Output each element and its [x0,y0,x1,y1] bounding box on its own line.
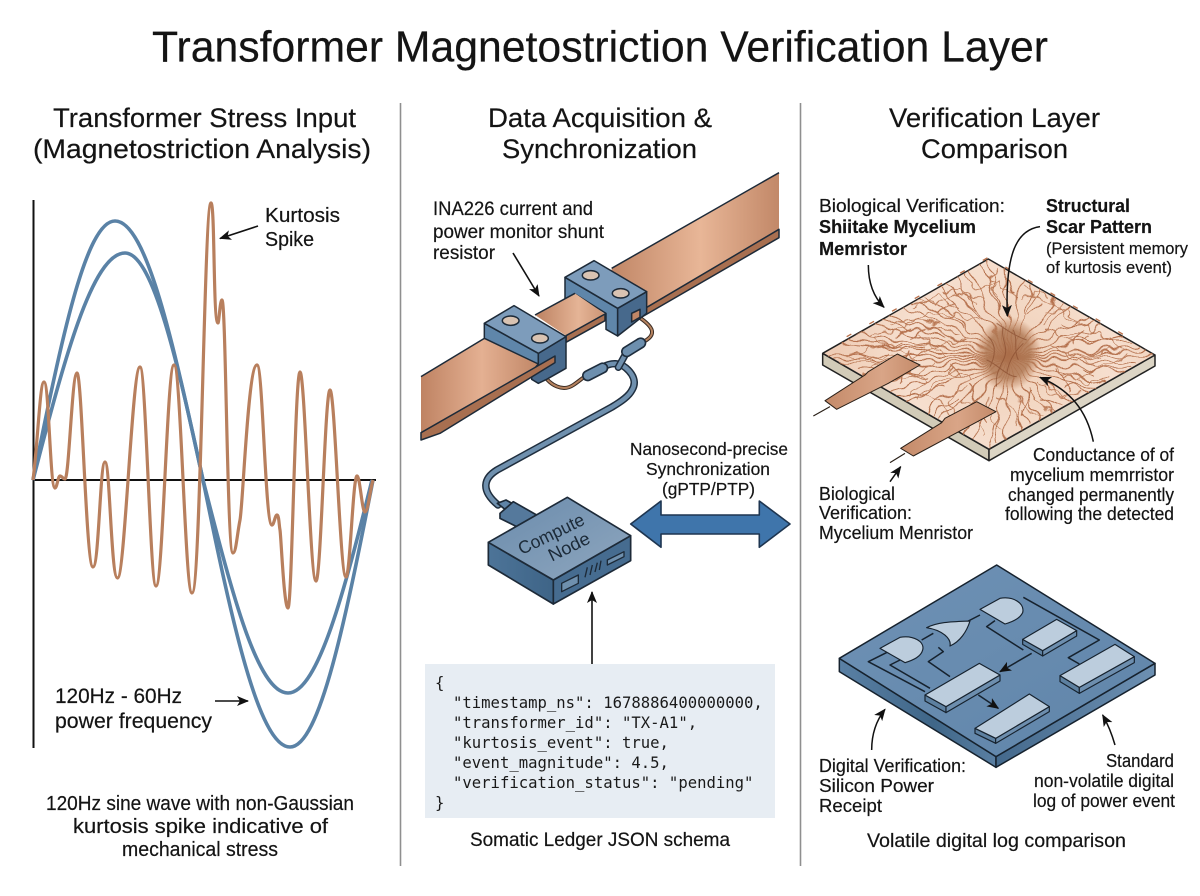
center shunt [535,293,605,342]
JSON schema panel: "event_magnitude": 4.5, [453,754,669,772]
label: nanosecond synchronization: (gPTP/PTP) [662,479,755,499]
label: silicon power receipt: Receipt [819,795,882,816]
label: conductance change: following the detected [1005,504,1174,524]
heading: data acquisition: Synchronization [502,134,697,164]
label: non-volatile log: non-volatile digital [1034,771,1174,791]
caption: waveform: 120Hz sine wave with non-Gaussian [46,793,354,815]
JSON schema panel: "kurtosis_event": true, [453,734,669,752]
title: Transformer Magnetostriction Verification Layer [152,22,1048,72]
label: shiitake mycelium memristor: Memristor [819,238,907,259]
heading: data acquisition: Data Acquisition & [488,103,712,133]
label: non-volatile log: log of power event [1033,791,1175,811]
arrows on chip [872,709,1115,750]
label: structural scar pattern: of kurtosis event) [1046,258,1172,277]
label: silicon power receipt: Silicon Power [819,775,934,796]
panel: verification layer comparison [813,103,1188,852]
cable: sensor to compute node [486,364,634,505]
label: shiitake mycelium memristor: Shiitake Mycelium [819,216,976,237]
caption: volatile digital log comparison: Volatile digital log comparison [867,830,1126,852]
label: conductance change: changed permanently [1008,485,1174,505]
arrows on board [868,227,1093,482]
label: conductance change: Conductance of of [1033,445,1175,465]
compute node: Node [545,528,593,565]
heading: verification layer: Comparison [921,134,1068,164]
label: conductance change [1005,445,1175,524]
callout: power frequency: 120Hz - 60Hz [55,685,182,708]
caption: waveform [46,793,354,861]
JSON schema panel: "timestamp_ns": 1678886400000000, [453,694,763,712]
label: INA226 shunt resistor [433,199,605,296]
callout: power frequency: power frequency [55,710,212,733]
heading: verification layer [889,103,1100,164]
label: structural scar pattern: (Persistent memory [1046,239,1188,258]
arrow: JSON to compute node [591,592,593,664]
waveform chart [33,200,376,748]
label: INA226 shunt resistor: power monitor shunt [433,222,605,243]
silicon chip diagram [839,565,1155,767]
label: conductance change: mycelium memrristor [1010,465,1174,485]
label: non-volatile log: Standard [1106,751,1174,771]
heading: transformer stress input: Transformer Stress Input [53,103,357,133]
label: silicon power receipt [819,755,966,816]
compute node [488,497,631,604]
label: shiitake mycelium memristor [819,195,1005,259]
label: INA226 shunt resistor: resistor [433,243,496,264]
heading: transformer stress input: (Magnetostriction Analysis) [33,134,371,164]
heading: transformer stress input [33,103,371,164]
right clamp [565,261,647,336]
wires [542,317,652,388]
left bar section [421,338,555,433]
JSON schema panel: { [435,674,444,692]
panel: transformer stress input [33,103,376,861]
caption: JSON schema: Somatic Ledger JSON schema [470,829,730,851]
electrodes [813,354,996,463]
JSON schema panel: "verification_status": "pending" [453,774,753,792]
callout: kurtosis spike: Kurtosis [265,205,340,227]
label: nanosecond synchronization: Nanosecond-precise [630,439,788,459]
heading: verification layer: Verification Layer [889,103,1100,133]
caption: waveform: kurtosis spike indicative of [73,816,328,838]
compute node: Compute [515,509,588,559]
mycelium network [823,259,1155,449]
memory blocks [925,619,1134,743]
mycelium memristor board [813,227,1155,482]
label: structural scar pattern [1046,195,1188,277]
label: shiitake mycelium memristor: Biological Verification: [819,195,1005,216]
double arrow: synchronization [631,501,790,547]
callout: kurtosis spike: Spike [265,229,314,251]
label: mycelium menristor [819,484,973,543]
label: mycelium menristor: Verification: [819,503,912,523]
label: mycelium menristor: Mycelium Menristor [819,523,973,543]
label: nanosecond synchronization: Synchronization [646,459,770,479]
callout: power frequency [55,685,248,733]
left clamp [484,306,566,383]
copper busbar with shunt clamps [421,173,779,440]
heading: data acquisition [488,103,712,164]
label: non-volatile log [1033,751,1175,811]
circuit traces [868,597,1099,708]
callout: kurtosis spike [220,205,340,251]
label: structural scar pattern: Scar Pattern [1046,216,1152,237]
JSON schema panel: "transformer_id": "TX-A1", [453,714,697,732]
label: structural scar pattern: Structural [1046,195,1130,216]
label: INA226 shunt resistor: INA226 current and [433,199,593,220]
label: nanosecond synchronization [630,439,788,499]
edge fuzz [847,257,1130,338]
caption: waveform: mechanical stress [122,839,278,861]
panel: data acquisition and synchronization [421,103,790,851]
JSON schema panel [425,664,775,818]
label: silicon power receipt: Digital Verification: [819,755,966,776]
label: mycelium menristor: Biological [819,484,895,504]
logic gates [880,598,1023,663]
scar blob [970,312,1046,396]
JSON schema panel: } [435,794,444,812]
